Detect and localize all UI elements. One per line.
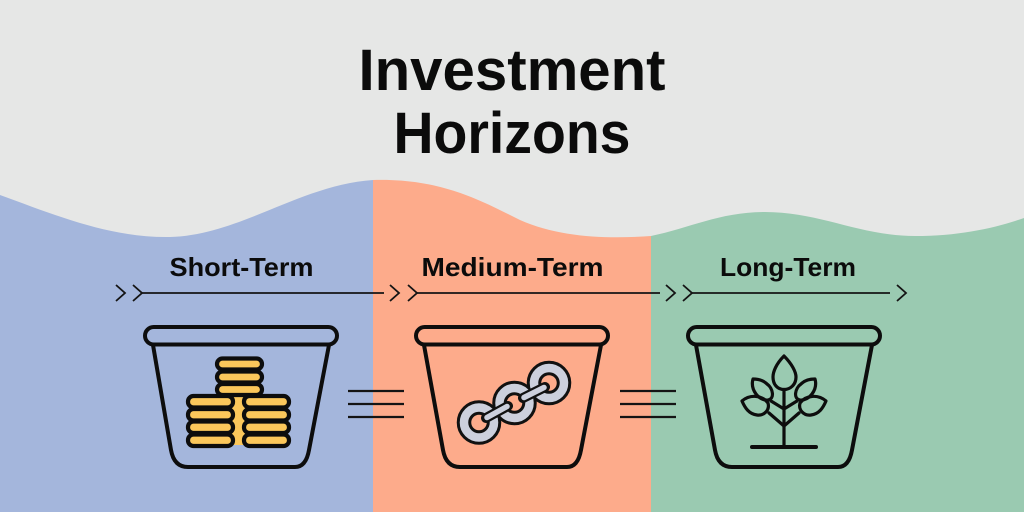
bucket: short-term [145, 327, 337, 467]
bucket: medium-term [416, 327, 608, 467]
panel: long-term background [651, 212, 1024, 512]
heading: short-term: Short-Term [170, 252, 314, 282]
icon: sapling [742, 356, 826, 447]
connector: medium to long [620, 391, 676, 417]
title: Horizons [394, 101, 630, 166]
panel: medium-term background [373, 180, 651, 512]
bucket: long-term [688, 327, 880, 467]
heading: medium-term: Medium-Term [422, 252, 604, 282]
title: Investment [358, 38, 666, 103]
title [358, 38, 666, 166]
connector: short to medium [348, 391, 404, 417]
panel: short-term background [0, 180, 373, 512]
arrow: long-term timeline [666, 285, 906, 301]
arrow: short-term timeline [116, 285, 384, 301]
heading: long-term: Long-Term [720, 252, 856, 282]
icon: chain links [464, 368, 564, 438]
arrow: medium-term timeline [390, 285, 660, 301]
icon: coin stacks [188, 358, 289, 446]
